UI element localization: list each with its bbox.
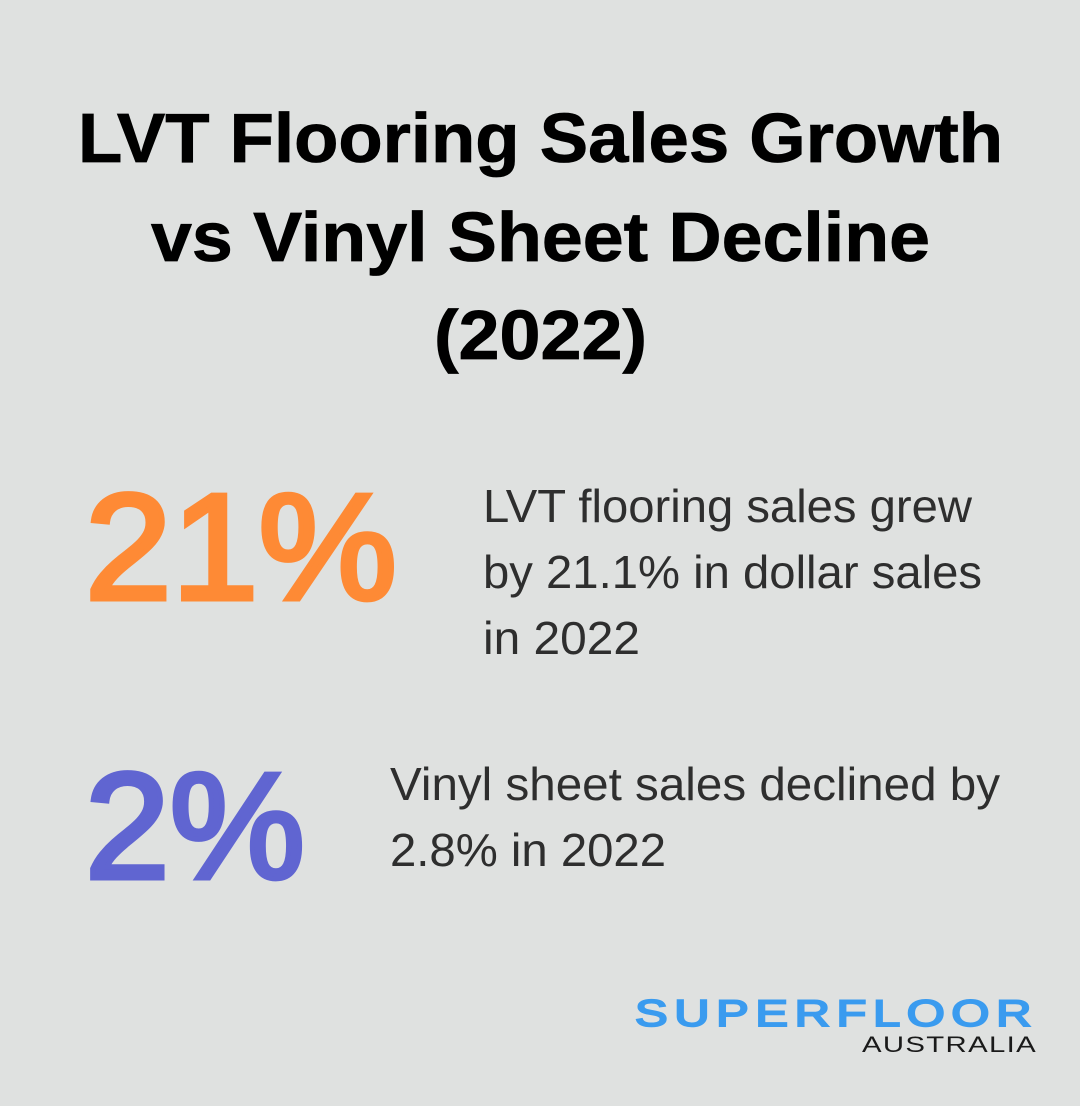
- logo: AUSTRALIA: [862, 1032, 1037, 1057]
- title: vs Vinyl Sheet Decline: [151, 198, 930, 276]
- stat: 2%: 2%: [85, 741, 305, 910]
- stat: 21%: 21%: [85, 462, 397, 631]
- title: LVT Flooring Sales Growth: [78, 99, 1003, 177]
- text: vinyl sheet description: [390, 758, 1000, 876]
- text: vinyl sheet description: 2.8% in 2022: [390, 824, 666, 876]
- text: vinyl sheet description: Vinyl sheet sales declined by: [390, 758, 1000, 810]
- text: LVT flooring description: LVT flooring sales grew: [483, 480, 973, 532]
- title: (2022): [434, 296, 647, 374]
- text: LVT flooring description: in 2022: [483, 612, 640, 664]
- title: [78, 99, 1003, 374]
- text: LVT flooring description: [483, 480, 982, 664]
- logo: SUPERFLOOR: [635, 993, 1038, 1034]
- logo: [635, 993, 1038, 1057]
- text: LVT flooring description: by 21.1% in dollar sales: [483, 546, 982, 598]
